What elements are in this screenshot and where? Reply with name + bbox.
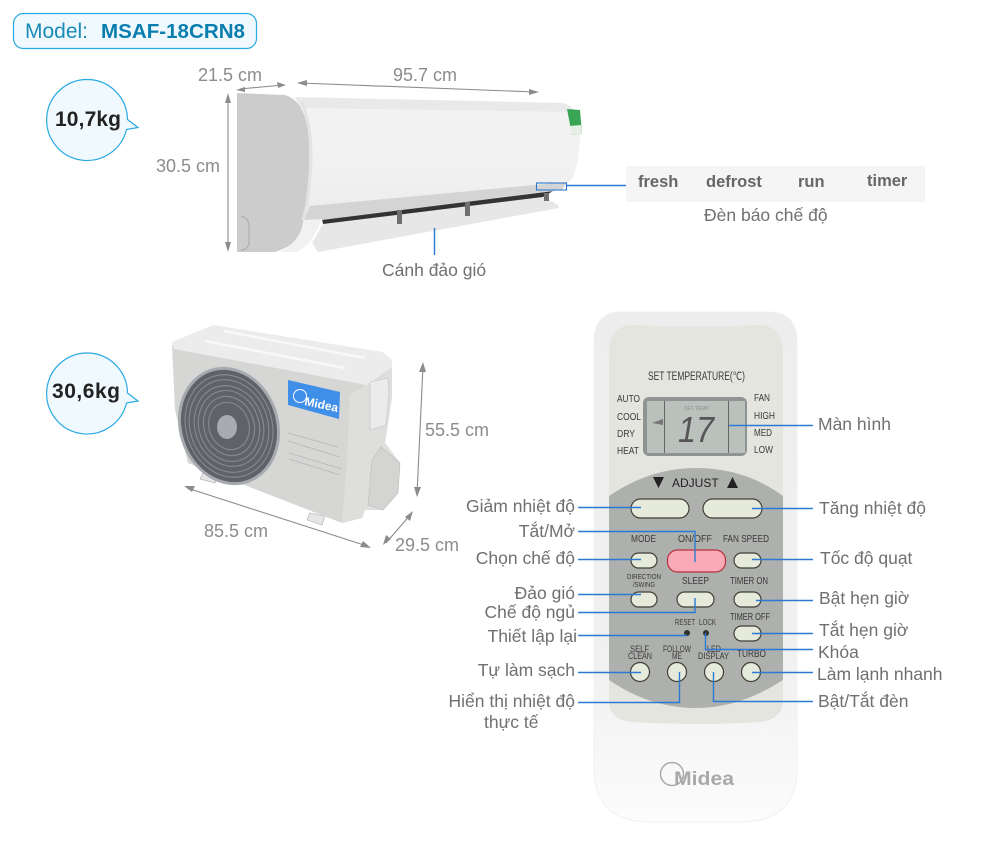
fan grille: [163, 353, 295, 499]
button labels: DIRECTION: [627, 572, 661, 581]
callout: on/off: Tắt/Mở: [519, 520, 575, 541]
vane: [312, 197, 559, 252]
vane hinges: [397, 193, 549, 224]
button labels: SLEEP: [682, 576, 709, 587]
LCD display: 17: [678, 409, 716, 450]
top vents: [295, 97, 576, 112]
button labels: LED: [707, 644, 721, 654]
callout: swing: [515, 583, 641, 603]
callout: decrease temperature: Giảm nhiệt độ: [466, 496, 575, 516]
mode indicator strip: [626, 166, 925, 225]
callout: follow me: Hiển thị nhiệt độ: [449, 691, 575, 711]
callout: turbo: Làm lạnh nhanh: [817, 664, 943, 684]
mode indicator strip: fresh: [638, 173, 678, 191]
mode labels: [617, 393, 775, 457]
callout: timer on: Bật hẹn giờ: [819, 588, 909, 608]
callout: LED: [714, 672, 908, 711]
white lower corner: [280, 219, 322, 252]
callout: follow me: [449, 672, 680, 732]
unit front cover: [293, 97, 580, 222]
callout: mode: Chọn chế độ: [476, 548, 575, 568]
callout: sleep: Chế độ ngủ: [484, 602, 575, 622]
callout: follow me: thực tế: [484, 712, 539, 732]
right fold: [342, 366, 400, 523]
side handle: [370, 378, 389, 430]
dark air outlet: [322, 191, 553, 224]
dimension: 21.5 cm: [198, 65, 286, 92]
mode labels: DRY: [617, 429, 635, 440]
callout: self clean: Tự làm sạch: [478, 660, 575, 680]
button labels: ON/OFF: [678, 534, 712, 545]
LCD display: [643, 397, 747, 456]
weight bubble: outdoor unit: [47, 353, 138, 434]
weight bubble: outdoor unit: 30,6kg: [52, 380, 120, 403]
model badge: Model:: [25, 20, 88, 43]
energy label: [567, 109, 582, 135]
unit body: [172, 345, 400, 523]
LCD display: SET TEMP.: [684, 406, 710, 412]
remote buttons: [630, 499, 762, 682]
mode indicator strip: timer: [867, 172, 908, 190]
button labels: FAN SPEED: [723, 534, 769, 545]
callout: vane: Cánh đảo gió: [382, 260, 486, 280]
button labels: TIMER ON: [730, 576, 768, 587]
mode labels: LOW: [754, 445, 773, 456]
button labels: LOCK: [699, 618, 717, 627]
callout: timer off: Tắt hẹn giờ: [819, 619, 908, 640]
button labels: CLEAN: [628, 651, 652, 661]
adjust label: [653, 476, 738, 490]
lower grey band: [303, 182, 567, 222]
mode labels: HIGH: [754, 411, 775, 422]
mode labels: AUTO: [617, 394, 640, 405]
dimension: 55.5 cm: [414, 362, 489, 497]
heading: SET TEMPERATURE(℃): [648, 371, 745, 383]
left callouts: [449, 496, 695, 732]
Midea logo: Midea: [674, 769, 734, 790]
weight bubble: indoor unit: [47, 79, 138, 160]
weight bubble: indoor unit: 10,7kg: [55, 108, 121, 131]
feet: [200, 473, 325, 525]
button labels: /SWING: [633, 580, 655, 589]
callout: sleep: [484, 598, 695, 622]
callout: fan speed: Tốc độ quạt: [820, 548, 913, 568]
callout: swing: Đảo gió: [515, 583, 575, 603]
button labels: FOLLOW: [663, 644, 691, 654]
dimension: 95.7 cm: [297, 65, 539, 95]
dimension: 95.7 cm: 95.7 cm: [393, 65, 457, 85]
callout: lock: [706, 633, 859, 662]
reset and lock holes: [684, 630, 709, 636]
dimension: 85.5 cm: 85.5 cm: [204, 521, 268, 541]
valve cover: [368, 447, 400, 510]
on/off button: [668, 550, 726, 572]
mode indicator strip: Đèn báo chế độ: [704, 205, 828, 225]
button labels: TIMER OFF: [730, 612, 770, 623]
mode indicator strip: defrost: [706, 173, 762, 191]
callout: increase temperature: Tăng nhiệt độ: [819, 498, 926, 518]
grey button area: [609, 468, 783, 708]
button labels: SELF: [630, 644, 649, 654]
top lid: [172, 325, 392, 385]
button labels: RESET: [675, 618, 695, 627]
callout: screen: Màn hình: [818, 414, 891, 434]
dimension: 30.5 cm: 30.5 cm: [156, 156, 220, 176]
callout: reset: Thiết lập lại: [488, 626, 577, 646]
outdoor unit illustration: [163, 325, 400, 525]
faceplate: [609, 325, 783, 724]
model badge: MSAF-18CRN8: [101, 21, 245, 43]
dimension: 30.5 cm: [156, 93, 231, 252]
adjust label: ADJUST: [672, 476, 719, 490]
side panel: [237, 93, 309, 252]
dimension: 21.5 cm: 21.5 cm: [198, 65, 262, 85]
indoor unit illustration: [237, 93, 582, 252]
callout: mode indicator: [536, 183, 626, 190]
remote control: [594, 312, 797, 822]
mode labels: MED: [754, 428, 772, 439]
button labels: MODE: [631, 534, 656, 545]
callout: on/off: [519, 520, 695, 562]
mode labels: HEAT: [617, 446, 639, 457]
button labels: TURBO: [737, 649, 766, 660]
button labels: DISPLAY: [698, 651, 729, 661]
button labels: [627, 534, 770, 661]
button labels: ME: [672, 651, 682, 661]
mode labels: FAN: [754, 393, 770, 404]
callout: vane: [382, 228, 486, 280]
model badge: [14, 14, 256, 48]
mode indicator strip: run: [798, 173, 825, 191]
dimension: 29.5 cm: [383, 511, 459, 555]
right callouts: [706, 414, 943, 711]
callout: lock: Khóa: [818, 642, 859, 662]
dimension: 55.5 cm: 55.5 cm: [425, 420, 489, 440]
callout: LED: Bật/Tắt đèn: [818, 690, 908, 711]
Midea logo: [660, 762, 734, 790]
mode labels: COOL: [617, 412, 641, 423]
Midea label: [288, 380, 340, 419]
dimension: 29.5 cm: 29.5 cm: [395, 535, 459, 555]
dimension: 85.5 cm: [184, 486, 371, 548]
louvres: [288, 433, 342, 475]
remote body: [594, 312, 797, 822]
Midea label: Midea: [303, 394, 340, 415]
